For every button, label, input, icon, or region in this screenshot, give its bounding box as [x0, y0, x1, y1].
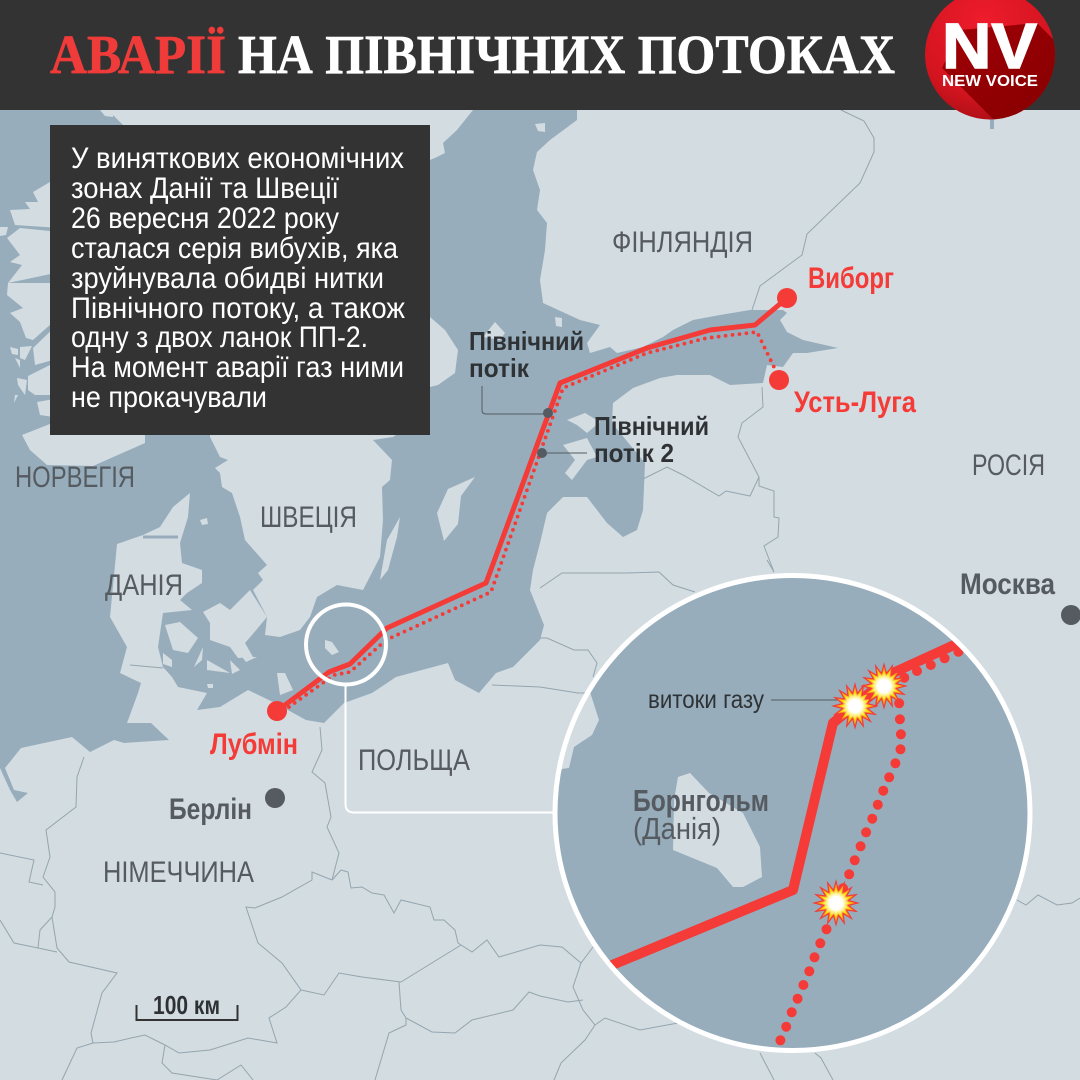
country labels: ШВЕЦІЯ	[260, 501, 357, 534]
label: gas leaks: витоки газу	[648, 686, 764, 714]
highlight ring around Bornholm with connector	[306, 604, 556, 812]
pipeline label: Nord Stream	[469, 326, 584, 418]
country labels: НОРВЕГІЯ	[15, 461, 135, 494]
text panel: summary: одну з двох ланок ПП-2.	[71, 321, 368, 354]
country labels: ПОЛЬЩА	[358, 744, 470, 777]
logo: NV New Voice: NV	[942, 10, 1037, 82]
Norway coast	[0, 180, 60, 418]
title: НА ПІВНІЧНИХ ПОТОКАХ	[238, 24, 895, 85]
pipeline overview: Nord Stream 1 solid	[277, 298, 787, 711]
label: Bornholm: (Данія)	[633, 811, 721, 846]
pipeline label: Nord Stream: Північний	[469, 326, 584, 356]
pipeline label: Nord Stream 2: Північний	[594, 411, 709, 441]
text panel: summary: сталася серія вибухів, яка	[71, 232, 398, 265]
pipeline overview: Nord Stream 2 dotted	[289, 332, 774, 707]
pipeline label: Nord Stream: потік	[469, 353, 530, 383]
country labels: ФІНЛЯНДІЯ	[612, 226, 753, 259]
text panel: summary: На момент аварії газ ними	[71, 351, 404, 384]
text panel: summary: зонах Данії та Швеції	[71, 172, 340, 205]
icon: explosion 3	[812, 879, 860, 927]
label: Bornholm: Борнгольм	[633, 783, 769, 818]
country labels: РОСІЯ	[972, 449, 1045, 482]
Baltic and North Sea	[0, 110, 838, 802]
icon: explosion 1	[831, 682, 879, 730]
label: Bornholm	[633, 783, 769, 846]
city markers and labels: Берлін	[169, 793, 252, 826]
icon: explosion 2	[860, 662, 908, 710]
zoom inset: Bornholm detail	[540, 576, 1030, 1050]
logo: NV New Voice: NEW VOICE	[942, 73, 1038, 90]
inset: Nord Stream 1 solid	[605, 640, 965, 968]
logo: NV New Voice	[925, 0, 1060, 122]
header bar	[0, 0, 1080, 110]
text panel: summary: не прокачували	[71, 381, 267, 414]
scale bar: 100 км	[153, 990, 220, 1020]
inlets	[143, 118, 992, 537]
pipeline label: Nord Stream 2: потік 2	[594, 438, 674, 468]
inset: Nord Stream 2 dots	[775, 647, 963, 1045]
text panel: summary: 26 вересня 2022 року	[71, 202, 339, 235]
inset land	[562, 693, 599, 769]
text panel: summary: Північного потоку, а також	[71, 292, 405, 325]
Bornholm island	[673, 773, 762, 887]
country labels: НІМЕЧЧИНА	[103, 856, 254, 889]
text panel: summary: У виняткових економічних	[71, 142, 404, 175]
city markers and labels	[169, 262, 1080, 826]
islands	[100, 110, 600, 695]
city markers and labels: Виборг	[808, 262, 894, 295]
pipeline label: Nord Stream 2	[537, 411, 709, 468]
text panel: summary: зруйнувала обидві нитки	[71, 262, 384, 295]
city markers and labels: Лубмін	[210, 728, 298, 761]
city markers and labels: Москва	[960, 568, 1055, 601]
city markers and labels: Усть-Луга	[794, 386, 916, 419]
text panel: summary	[50, 125, 430, 435]
country labels: ДАНІЯ	[105, 569, 183, 602]
title: АВАРІЇ	[50, 24, 226, 85]
country labels	[15, 226, 1045, 889]
